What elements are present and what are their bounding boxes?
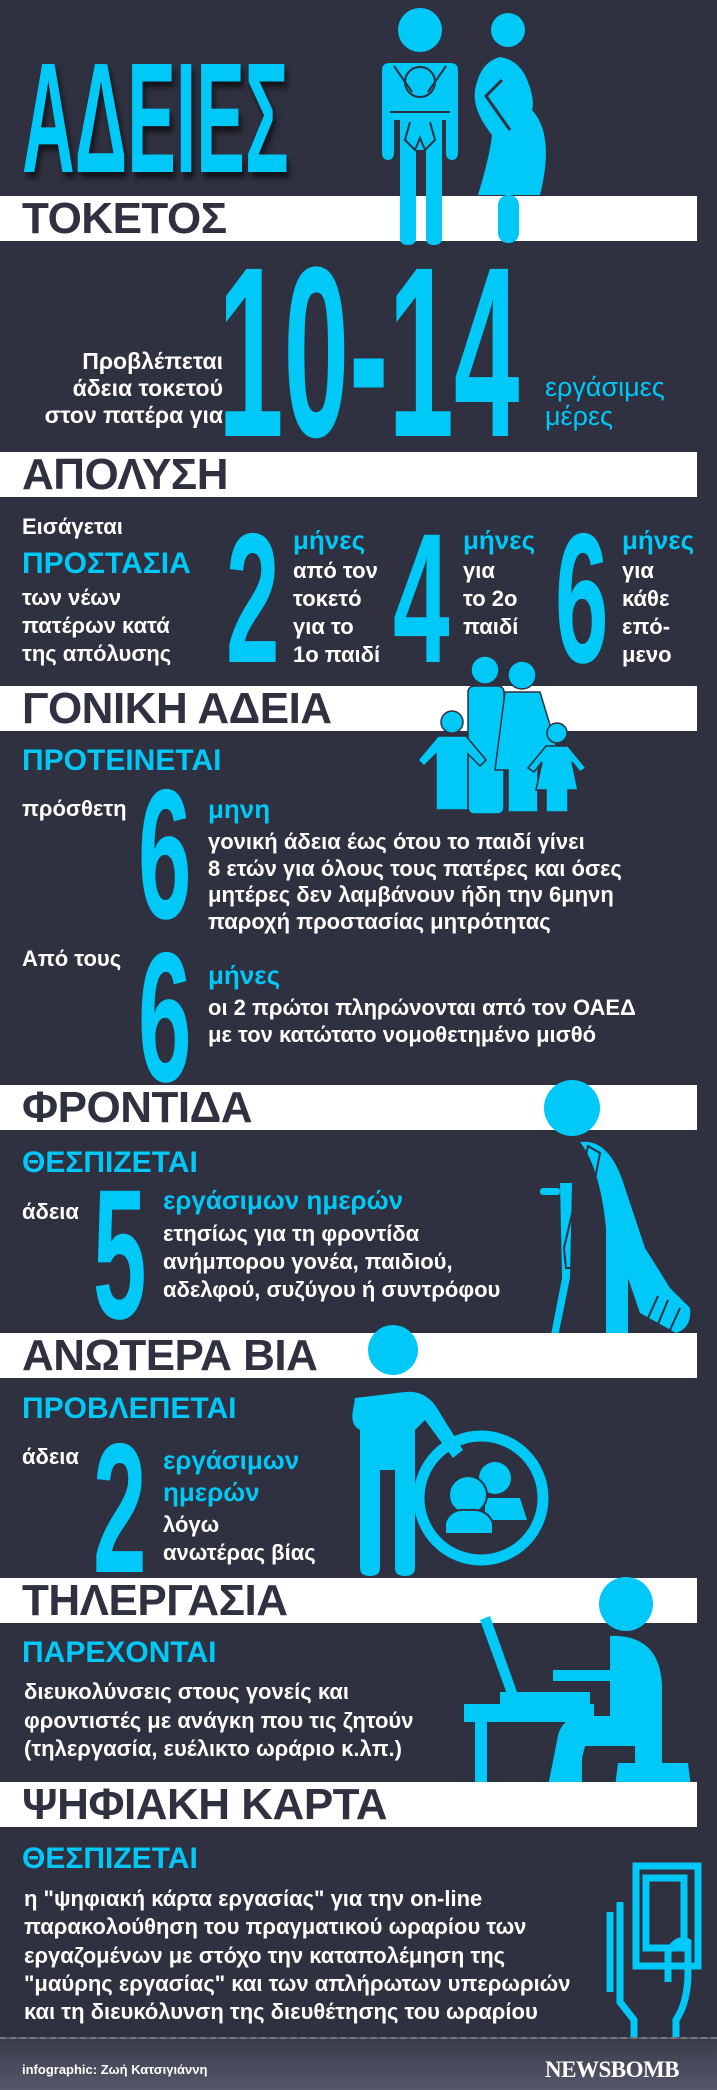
bar: ΤΟΚΕΤΟΣ: ΤΟΚΕΤΟΣ xyxy=(22,194,227,243)
text: εργάσιμες μέρες: μέρες xyxy=(545,401,613,431)
text: επό- xyxy=(622,614,670,639)
text: ψηφιακή κάρτα: και τη διευκόλυνση της διευθέτησης του ωραρίου xyxy=(24,1999,538,2024)
text: εργάσιμων ημερών λόγω ανωτέρας βίας: εργάσιμων xyxy=(163,1445,299,1475)
subheading: ΠΡΟΤΕΙΝΕΤΑΙ: ΠΡΟΤΕΙΝΕΤΑΙ xyxy=(22,744,221,777)
text: γονική άδεια έως ότου το παιδί γίνει xyxy=(208,829,585,854)
text: των νέων πατέρων: πατέρων κατά xyxy=(22,613,170,638)
text: άδεια: άδεια xyxy=(22,1444,79,1469)
text: ψηφιακή κάρτα: "μαύρης εργασίας" και των απλήρωτων υπερωριών xyxy=(24,1971,570,1996)
text: μητέρες δεν λαμβάνουν ήδη την 6μηνη xyxy=(208,882,614,907)
text: 1ο παιδί xyxy=(293,642,380,667)
text: πρόσθετη: πρόσθετη xyxy=(22,796,127,821)
text: Προβλέπεται: Προβλέπεται xyxy=(82,348,223,374)
subheading: ΠΡΟΣΤΑΣΙΑ: ΠΡΟΣΤΑΣΙΑ xyxy=(22,547,191,580)
big 2 months: 2 xyxy=(226,496,280,702)
big 6 second: 6 xyxy=(138,915,192,1121)
text: ανωτέρας βίας xyxy=(163,1540,316,1565)
text: εργάσιμων ημερών λόγω ανωτέρας βίας xyxy=(163,1445,299,1507)
text: το 2ο xyxy=(463,586,517,611)
text: 8 ετών για όλους τους πατέρες και όσες xyxy=(208,856,622,881)
text: παροχή προστασίας μητρότητας xyxy=(208,909,551,934)
text: κάθε xyxy=(622,586,669,611)
text: Εισάγεται: Εισάγεται xyxy=(22,514,123,539)
bar: ΑΝΩΤΕΡΑ ΒΙΑ: ΑΝΩΤΕΡΑ ΒΙΑ xyxy=(22,1331,317,1380)
icon: family xyxy=(419,656,585,814)
text: Από τους: Από τους xyxy=(22,946,121,971)
text: Προβλέπεται: άδεια τοκετού xyxy=(73,375,223,401)
text: διευκολύνσεις: διευκολύνσεις στους γονείς και xyxy=(24,1679,349,1704)
text: ανήμπορου γονέα, παιδιού, xyxy=(163,1249,453,1274)
subheading: ΘΕΣΠΙΖΕΤΑΙ: ΘΕΣΠΙΖΕΤΑΙ xyxy=(22,1146,198,1179)
bar: ΨΗΦΙΑΚΗ ΚΑΡΤΑ: ΨΗΦΙΑΚΗ ΚΑΡΤΑ xyxy=(22,1780,387,1829)
text: Προβλέπεται xyxy=(45,348,223,428)
text: από τον xyxy=(293,558,378,583)
text: διευκολύνσεις xyxy=(24,1679,413,1761)
bar: ΑΠΟΛΥΣΗ xyxy=(0,452,697,497)
subheading: ΠΡΟΒΛΕΠΕΤΑΙ: ΠΡΟΒΛΕΠΕΤΑΙ xyxy=(22,1392,236,1425)
bar: ΨΗΦΙΑΚΗ ΚΑΡΤΑ xyxy=(0,1782,697,1827)
text: μήνες xyxy=(622,525,694,555)
bar: ΦΡΟΝΤΙΔΑ: ΦΡΟΝΤΙΔΑ xyxy=(22,1083,252,1132)
bar: ΤΗΛΕΡΓΑΣΙΑ xyxy=(0,1578,697,1623)
bar: ΦΡΟΝΤΙΔΑ xyxy=(0,1085,697,1130)
icon: person at laptop xyxy=(464,1577,690,1782)
title: ΑΔΕΙΕΣ xyxy=(22,31,289,206)
text: των νέων πατέρων: των νέων xyxy=(22,585,121,610)
icon: hand holding card xyxy=(606,1862,702,2037)
text: ψηφιακή κάρτα xyxy=(24,1886,570,2024)
big 4 months: 4 xyxy=(393,496,450,702)
text: εργάσιμων ημερών λόγω ανωτέρας βίας: ημερών xyxy=(163,1477,260,1507)
big number 10-14: 10-14 xyxy=(218,217,519,488)
big 6: 6 xyxy=(138,752,192,958)
text: εργάσιμων ημερών: εργάσιμων ημερών xyxy=(163,1185,403,1215)
icon: father with baby and pregnant mother xyxy=(382,8,546,245)
bar: ΤΟΚΕΤΟΣ xyxy=(0,196,697,241)
big 6 months: 6 xyxy=(555,496,609,702)
subheading: ΘΕΣΠΙΖΕΤΑΙ: ΘΕΣΠΙΖΕΤΑΙ xyxy=(22,1842,198,1875)
text: ψηφιακή κάρτα: η "ψηφιακή κάρτα εργασίας" για την on-line xyxy=(24,1886,482,1911)
logo: NEWSBOMB: NEWSBOMB xyxy=(545,2057,679,2082)
text: εργάσιμες μέρες: εργάσιμες xyxy=(545,372,665,402)
text: μηνη: μηνη xyxy=(208,794,270,824)
bar: ΑΝΩΤΕΡΑ ΒΙΑ xyxy=(0,1333,697,1378)
text: διευκολύνσεις: φροντιστές με ανάγκη που τις ζητούν xyxy=(24,1708,413,1732)
subheading: ΠΑΡΕΧΟΝΤΑΙ: ΠΑΡΕΧΟΝΤΑΙ xyxy=(22,1636,216,1669)
bar: ΤΗΛΕΡΓΑΣΙΑ: ΤΗΛΕΡΓΑΣΙΑ xyxy=(22,1576,288,1625)
text: ψηφιακή κάρτα: παρακολούθηση του πραγματικού ωραρίου των xyxy=(24,1914,526,1939)
text: των νέων πατέρων: της απόλυσης xyxy=(22,641,171,666)
text: των νέων πατέρων xyxy=(22,585,171,666)
text: Προβλέπεται: στον πατέρα για xyxy=(45,402,223,428)
text: άδεια: άδεια xyxy=(22,1199,79,1224)
text: μήνες ΟΑΕΔ: μήνες xyxy=(208,960,280,990)
text: μήνες xyxy=(293,525,365,555)
text: λόγω xyxy=(163,1512,219,1537)
big 2: 2 xyxy=(93,1406,147,1612)
text: εργάσιμες μέρες xyxy=(545,372,665,431)
text: για xyxy=(463,558,495,583)
text: οι 2 πρώτοι πληρώνονται από τον ΟΑΕΔ xyxy=(208,995,636,1020)
icon: person with circle xyxy=(352,1325,548,1576)
text: μήνες xyxy=(463,525,535,555)
bar: ΑΠΟΛΥΣΗ: ΑΠΟΛΥΣΗ xyxy=(22,450,228,499)
icon: person with crutch xyxy=(540,1080,690,1333)
text: για xyxy=(622,558,654,583)
text: με τον κατώτατο νομοθετημένο μισθό xyxy=(208,1022,596,1047)
bar: ΓΟΝΙΚΗ ΑΔΕΙΑ xyxy=(0,686,697,731)
text: για το xyxy=(293,614,354,639)
text: παιδί xyxy=(463,614,518,639)
footer xyxy=(0,2037,717,2090)
text: τοκετό xyxy=(293,586,362,611)
text: μενο xyxy=(622,642,672,667)
bar: ΓΟΝΙΚΗ ΑΔΕΙΑ: ΓΟΝΙΚΗ ΑΔΕΙΑ xyxy=(22,684,332,733)
big 5: 5 xyxy=(93,1152,147,1358)
text: ετησίως για τη φροντίδα xyxy=(163,1221,419,1246)
text: ψηφιακή κάρτα: εργαζομένων με στόχο την καταπολέμηση της xyxy=(24,1943,505,1968)
text: διευκολύνσεις: (τηλεργασία, ευέλικτο ωράριο κ.λπ.) xyxy=(24,1736,402,1761)
footer credit: infographic: Ζωή Κατσιγιάννη xyxy=(22,2062,207,2077)
text: αδελφού, συζύγου ή συντρόφου xyxy=(163,1277,500,1302)
